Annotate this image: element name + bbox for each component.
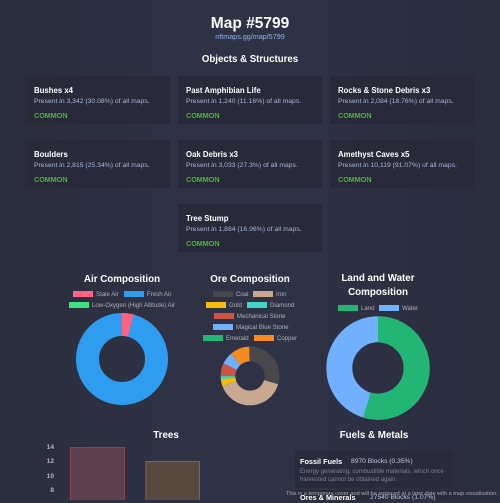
- ores and minerals name: Ores & Minerals: [300, 493, 356, 502]
- card: rocks and stone debris: Present in 2,084 (18.76%) of all maps.: [338, 98, 454, 105]
- heading: objects and structures: Objects & Structures: [202, 54, 298, 64]
- heading: trees: Trees: [153, 430, 179, 441]
- legend: land and water: Land: [361, 304, 375, 312]
- card: fossil fuels: [295, 451, 453, 488]
- trees bar chart: 14: [47, 444, 54, 451]
- ores and minerals amount: 27540 Blocks (1.07%): [370, 494, 435, 501]
- fossil fuels name: Fossil Fuels: [300, 457, 342, 466]
- heading: land and water composition: Composition: [348, 287, 408, 298]
- title: Map #5799: [211, 15, 289, 32]
- card: ores and minerals: [295, 490, 453, 500]
- card: bushes: Bushes x4: [34, 86, 73, 94]
- legend: ore: Copper: [277, 334, 297, 342]
- card: oak debris: Present in 3,033 (27.3%) of all maps.: [186, 162, 298, 169]
- card: past amphibian life: COMMON: [186, 110, 220, 120]
- legend: land and water: [338, 304, 418, 312]
- map link: nftmaps.gg/map/5799: [215, 32, 285, 41]
- card: bushes: Present in 3,342 (30.08%) of all maps.: [34, 98, 150, 105]
- fossil fuels description: [300, 468, 444, 483]
- card: amethyst caves: [330, 140, 474, 188]
- air donut: [88, 324, 156, 394]
- fossil fuels description: harvested cannot be obtained again.: [300, 477, 397, 483]
- legend: ore: Gold: [229, 302, 242, 308]
- trees bar chart: 10: [47, 473, 54, 480]
- legend: air: Stale Air: [96, 290, 119, 298]
- legend: ore: Iron: [276, 290, 287, 298]
- card: tree stump: Present in 1,884 (16.96%) of all maps.: [186, 226, 302, 233]
- heading: fuels and metals: Fuels & Metals: [340, 430, 408, 441]
- ore donut: [228, 354, 272, 398]
- legend: ore: Diamond: [270, 302, 294, 308]
- card: bushes: [26, 76, 170, 124]
- trees bar chart: 8: [50, 487, 54, 494]
- card: amethyst caves: Present in 10,119 (91.07%) of all maps.: [338, 162, 457, 169]
- legend: ore: Mechanical Stone: [237, 312, 285, 320]
- heading: air composition: Air Composition: [84, 274, 160, 285]
- card: bushes: COMMON: [34, 110, 68, 120]
- temporary cover note: This is a temporary cover and will be replaced at a later date with a map visualisation.: [286, 491, 498, 497]
- heading: land and water composition: Land and Water: [341, 273, 415, 284]
- card: rocks and stone debris: [330, 76, 474, 124]
- card: boulders: [26, 140, 170, 188]
- legend: land and water: Water: [402, 304, 418, 312]
- card: tree stump: Tree Stump: [186, 214, 228, 222]
- legend: ore: [203, 290, 297, 342]
- trees bar chart: 12: [47, 458, 54, 465]
- card: tree stump: COMMON: [186, 238, 220, 248]
- card: oak debris: Oak Debris x3: [186, 150, 238, 158]
- fossil fuels amount: 8970 Blocks (0.35%): [351, 458, 413, 465]
- card: rocks and stone debris: COMMON: [338, 110, 372, 120]
- legend: air: Fresh Air: [147, 290, 171, 298]
- legend: ore: Emerald: [226, 334, 249, 342]
- card: tree stump: [178, 204, 322, 252]
- card: amethyst caves: Amethyst Caves x5: [338, 150, 410, 158]
- card: boulders: Present in 2,815 (25.34%) of all maps.: [34, 162, 150, 169]
- legend: ore: Coal: [236, 290, 249, 298]
- heading: land and water composition: [341, 273, 415, 298]
- fossil fuels description: Energy generating, combustible materials, which once: [300, 469, 444, 475]
- legend: air: Low-Oxygen (High Altitude) Air: [92, 302, 175, 308]
- card: past amphibian life: Past Amphibian Life: [186, 86, 261, 94]
- card: past amphibian life: [178, 76, 322, 124]
- trees bar chart: [47, 444, 200, 503]
- card: rocks and stone debris: Rocks & Stone Debris x3: [338, 86, 430, 94]
- card: boulders: COMMON: [34, 174, 68, 184]
- card: boulders: Boulders: [34, 150, 68, 158]
- legend: air: [69, 290, 175, 308]
- card: amethyst caves: COMMON: [338, 174, 372, 184]
- heading: ore composition: Ore Composition: [210, 274, 290, 285]
- card: past amphibian life: Present in 1,240 (11.16%) of all maps.: [186, 98, 301, 105]
- card: oak debris: COMMON: [186, 174, 220, 184]
- legend: ore: Magical Blue Stone: [236, 324, 289, 330]
- card: oak debris: [178, 140, 322, 188]
- land and water donut: [339, 329, 417, 407]
